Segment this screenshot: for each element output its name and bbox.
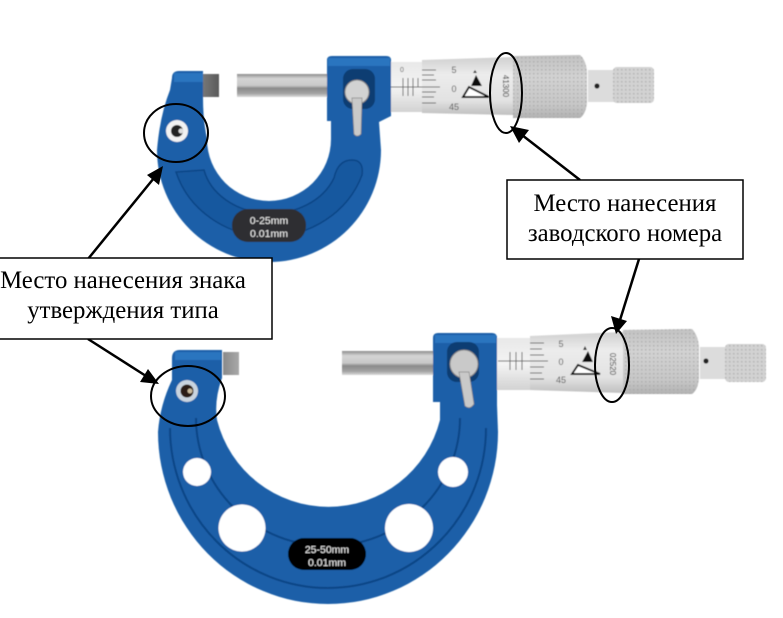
spindle xyxy=(342,351,435,375)
thimble xyxy=(530,332,623,393)
spindle xyxy=(237,74,329,97)
knurled grip xyxy=(623,329,699,394)
scale xyxy=(498,343,548,379)
micrometer: 0-25 mm xyxy=(157,55,654,262)
range label: 0.01mm xyxy=(250,228,288,240)
callout: serial number location: заводского номера xyxy=(528,220,722,247)
scale xyxy=(391,70,440,103)
hole xyxy=(385,504,433,552)
ratchet xyxy=(613,67,654,103)
micrometer: 25-50 mm xyxy=(158,329,766,604)
callout: type approval mark location: Место нанесения знака xyxy=(0,267,246,294)
range label: 0-25mm xyxy=(250,215,289,227)
clamp xyxy=(343,69,375,109)
hole xyxy=(183,458,211,486)
thimble xyxy=(422,57,513,115)
micrometer: 25-50 mm: 5 xyxy=(558,339,564,349)
ratchet xyxy=(725,344,766,382)
range label xyxy=(288,538,366,570)
callout: type approval mark location xyxy=(0,258,272,339)
hole xyxy=(218,504,266,552)
frame highlights xyxy=(175,335,496,360)
callout: serial number location: Место нанесения xyxy=(534,190,716,217)
clamp xyxy=(447,342,479,382)
seal mark xyxy=(166,120,188,142)
micrometer: 0-25 mm: 5 xyxy=(451,65,457,75)
icon: type approval triangle mark xyxy=(463,70,489,97)
serial number: 02520 xyxy=(608,353,617,376)
callout: serial number location xyxy=(507,180,743,259)
arrow: right box to lower serial xyxy=(611,259,639,334)
range label xyxy=(232,209,306,242)
micrometer: 0-25 mm: 0 xyxy=(400,67,404,74)
marker ellipses xyxy=(144,53,629,426)
arrow: right box to upper serial xyxy=(510,126,580,180)
neck xyxy=(700,347,727,379)
icon: type approval triangle mark xyxy=(572,346,600,374)
neck xyxy=(588,70,614,102)
micrometer: 25-50 mm: 45 xyxy=(556,375,566,385)
clamp knob and lever xyxy=(345,80,369,136)
callout: type approval mark location: утверждения типа xyxy=(27,297,219,324)
inner frame groove xyxy=(196,418,460,546)
knurled grip xyxy=(513,55,587,118)
serial number: 41300 xyxy=(501,75,510,98)
anvil xyxy=(223,352,239,375)
hole xyxy=(438,457,468,487)
micrometer: 25-50 mm: 0 xyxy=(558,357,564,367)
frame groove xyxy=(170,428,486,588)
frame xyxy=(158,333,498,604)
seal mark xyxy=(176,380,198,402)
clamp knob and lever xyxy=(450,350,478,408)
micrometer: 0-25 mm: 45 xyxy=(449,102,459,112)
frame highlights xyxy=(174,58,390,82)
micrometer: 0-25 mm: 0 xyxy=(451,84,457,94)
range label: 25-50mm xyxy=(305,544,349,556)
arrow: left box to upper seal xyxy=(88,166,163,259)
range label: 0.01mm xyxy=(308,557,346,569)
sleeve xyxy=(495,338,531,390)
arrow: left box to lower seal xyxy=(88,339,159,384)
anvil xyxy=(203,74,219,97)
sleeve xyxy=(388,62,424,112)
frame xyxy=(157,56,391,262)
frame groove xyxy=(176,160,362,237)
